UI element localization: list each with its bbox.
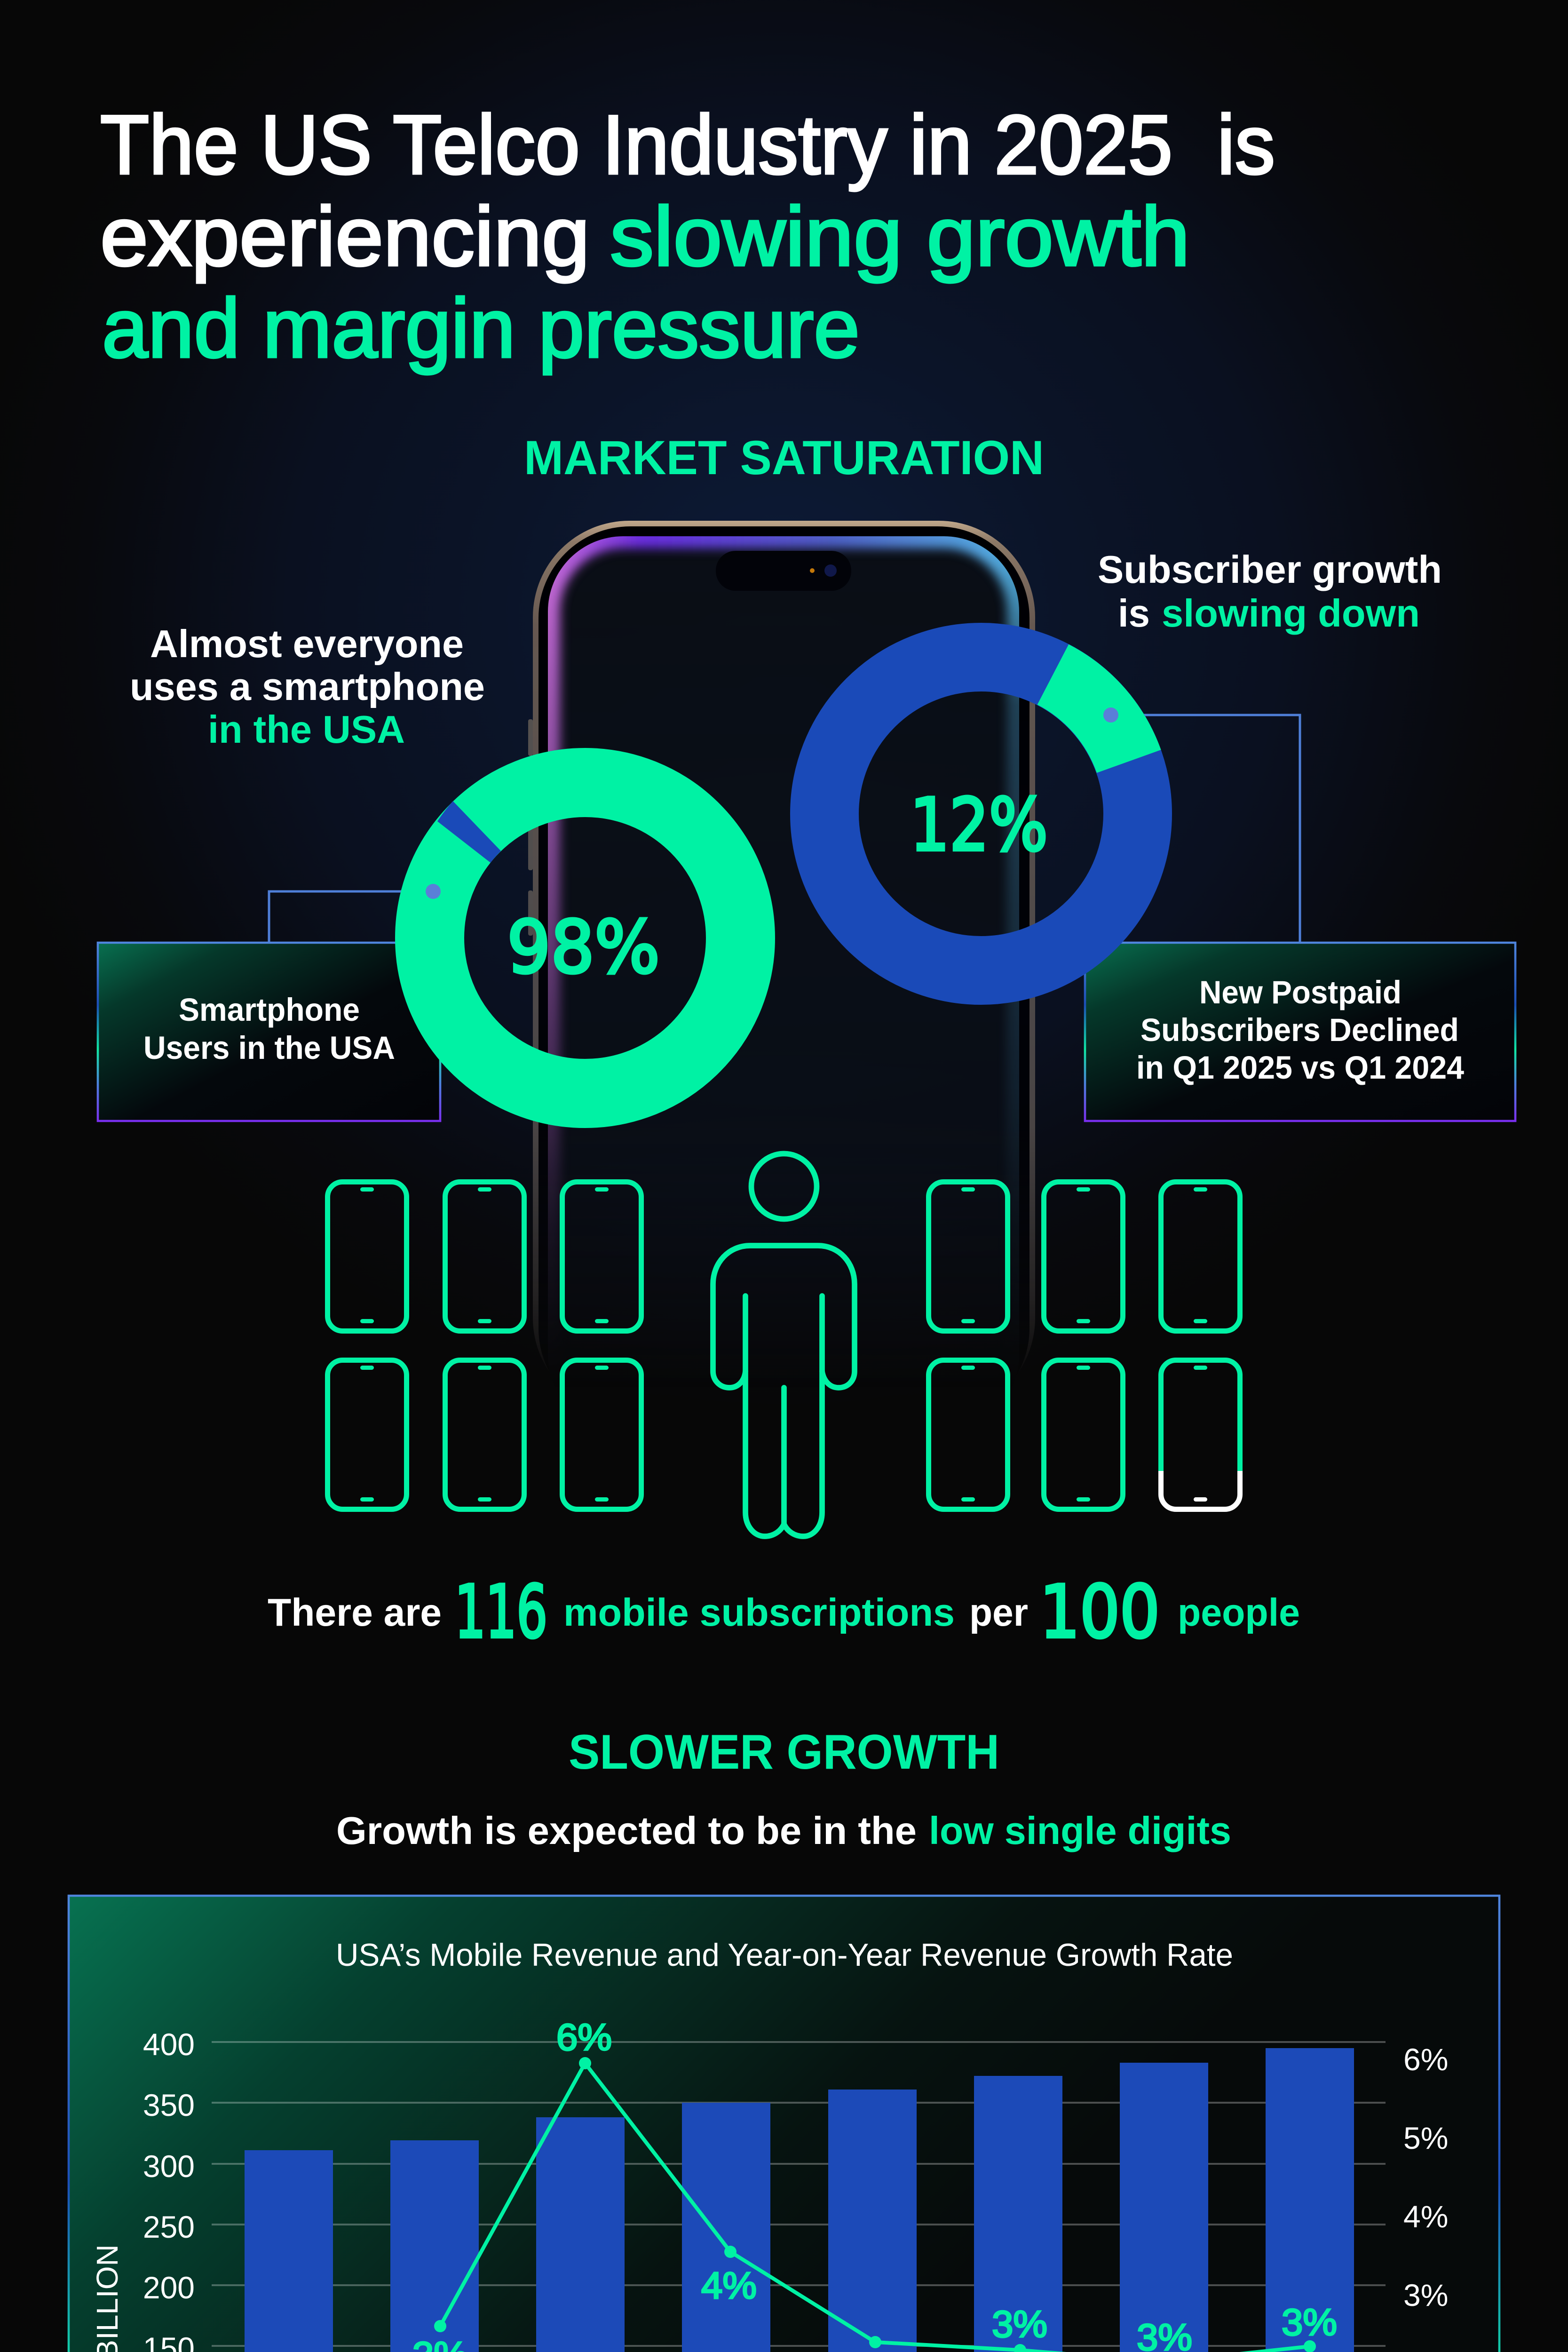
stat line: subscriptions per people: people (1178, 1590, 1300, 1634)
phone icon (928, 1360, 1007, 1509)
callout box: smartphone users (98, 943, 440, 1121)
title: The US Telco Industry in 2025 is (100, 98, 1275, 191)
growth rate labels: 3% (1282, 2301, 1337, 2343)
heading: slower growth: SLOWER GROWTH (569, 1725, 999, 1780)
donut: 98% (426, 783, 740, 1093)
right axis labels: 4% (1403, 2199, 1448, 2234)
phone icon (327, 1360, 406, 1509)
title: slowing growth (610, 190, 1190, 283)
stat line: subscriptions per people: 100 (1040, 1570, 1160, 1654)
subheading: almost everyone: uses a smartphone (130, 665, 485, 708)
stat line: subscriptions per people (268, 1570, 1300, 1654)
bars: revenue (245, 2048, 1354, 2352)
connector: right donut to box (1111, 715, 1300, 942)
growth rate labels: 4% (701, 2265, 757, 2306)
phone icon: partial white fill (1161, 1360, 1240, 1509)
stat line: subscriptions per people: There are (268, 1590, 442, 1634)
left axis labels: 400 (143, 2027, 195, 2062)
right axis labels: 6% (1403, 2042, 1448, 2077)
right axis labels: 3% (1403, 2278, 1448, 2312)
subheading: growth expected: low single digits (929, 1809, 1231, 1852)
title (100, 98, 1275, 375)
left axis labels: 200 (143, 2270, 195, 2305)
callout box: new postpaid subscribers (1085, 943, 1515, 1121)
phone icon (445, 1182, 524, 1331)
phone illustration (528, 521, 1035, 1430)
growth rate labels: 6% (556, 2016, 612, 2058)
stat line: subscriptions per people: per (969, 1590, 1028, 1634)
title: and margin pressure (102, 281, 860, 375)
icon group: phones right (928, 1182, 1240, 1509)
heading: market saturation: MARKET SATURATION (524, 431, 1044, 485)
callout box: new postpaid subscribers: Subscribers Declined (1140, 1012, 1459, 1048)
phone icon (1044, 1182, 1123, 1331)
callout box: new postpaid subscribers: New Postpaid (1199, 974, 1402, 1010)
donut: 98%: 98% (507, 906, 660, 990)
phone icon (928, 1182, 1007, 1331)
phone icon (562, 1182, 641, 1331)
phone icon (562, 1360, 641, 1509)
chart title: USA’s Mobile Revenue and Year-on-Year Revenue Growth Rate (336, 1937, 1233, 1973)
callout box: smartphone users: Smartphone (179, 992, 360, 1028)
growth rate labels (412, 2016, 1337, 2352)
stat line: subscriptions per people: 116 (455, 1570, 547, 1654)
subheading: almost everyone: in the USA (208, 707, 405, 751)
connector: left donut to box (269, 891, 433, 942)
subheading: subscriber growth: slowing down (1162, 591, 1420, 635)
phone icon (327, 1182, 406, 1331)
callout box: new postpaid subscribers: in Q1 2025 vs Q1 2024 (1136, 1049, 1464, 1086)
donut: 12%: 12% (910, 783, 1048, 867)
subheading: almost everyone: Almost everyone (150, 622, 464, 666)
callout box: smartphone users: Users in the USA (143, 1030, 395, 1066)
panel: revenue chart (69, 1896, 1499, 2352)
left axis labels (143, 2027, 195, 2352)
left axis labels: 350 (143, 2088, 195, 2122)
stat line: subscriptions per people: mobile subscriptions (563, 1590, 955, 1634)
growth rate labels: 3% (992, 2303, 1047, 2345)
left axis labels: 300 (143, 2149, 195, 2184)
right axis labels: 5% (1403, 2121, 1448, 2155)
subheading: growth expected (336, 1809, 1231, 1852)
phone icon (1044, 1360, 1123, 1509)
title: experiencing (100, 190, 590, 283)
subheading: growth expected: Growth is expected to be in the (336, 1809, 917, 1852)
phone icon (445, 1360, 524, 1509)
icon: person (713, 1153, 855, 1536)
phone icon (1161, 1182, 1240, 1331)
left axis labels: 250 (143, 2209, 195, 2244)
subheading: subscriber growth: Subscriber growth (1098, 548, 1442, 591)
subheading: almost everyone (130, 622, 485, 751)
subheading: subscriber growth: is (1118, 591, 1150, 635)
donut: 12% (824, 644, 1161, 970)
line: growth rate (434, 2057, 1316, 2352)
subheading: subscriber growth (1098, 548, 1442, 635)
icon group: phones left (327, 1182, 641, 1509)
right axis labels (1403, 2042, 1448, 2352)
